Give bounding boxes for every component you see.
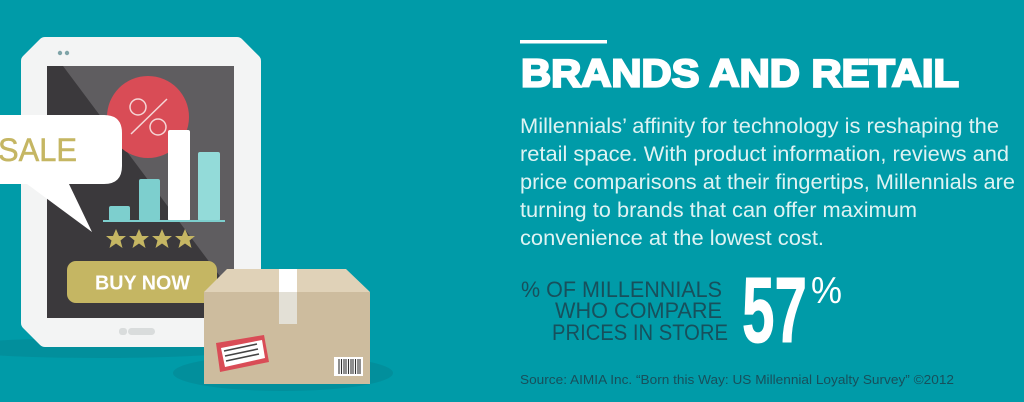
percent badge <box>107 76 189 158</box>
buy now button: BUY NOW <box>95 272 190 294</box>
statistic value: 57 <box>742 258 807 362</box>
body text: convenience at the lowest cost. <box>520 226 824 250</box>
source: Source: AIMIA Inc. “Born this Way: US Millennial Loyalty Survey” ©2012 <box>520 372 954 387</box>
sale speech bubble <box>0 115 122 232</box>
body text: turning to brands that can offer maximum <box>520 198 917 222</box>
statistic value: % <box>811 270 842 311</box>
cardboard box <box>204 269 370 384</box>
heading: BRANDS AND RETAIL <box>521 52 959 96</box>
sale speech bubble: SALE <box>0 132 77 168</box>
box ground shadow <box>173 355 393 391</box>
tablet illustration <box>28 44 254 340</box>
bar chart <box>103 130 225 222</box>
statistic label: % OF MILLENNIALS <box>521 277 722 302</box>
rating stars <box>106 229 195 248</box>
statistic label: PRICES IN STORE <box>552 320 728 345</box>
statistic label: WHO COMPARE <box>555 298 722 323</box>
body text <box>520 114 1015 250</box>
tablet ground shadow <box>0 338 250 358</box>
statistic label <box>521 277 728 345</box>
shipping label <box>216 335 269 372</box>
buy now button <box>67 261 217 303</box>
body text: price comparisons at their fingertips, Millennials are <box>520 170 1015 194</box>
body text: Millennials’ affinity for technology is reshaping the <box>520 114 999 138</box>
body text: retail space. With product information, reviews and <box>520 142 1009 166</box>
heading rule <box>520 40 607 44</box>
barcode <box>334 357 363 376</box>
